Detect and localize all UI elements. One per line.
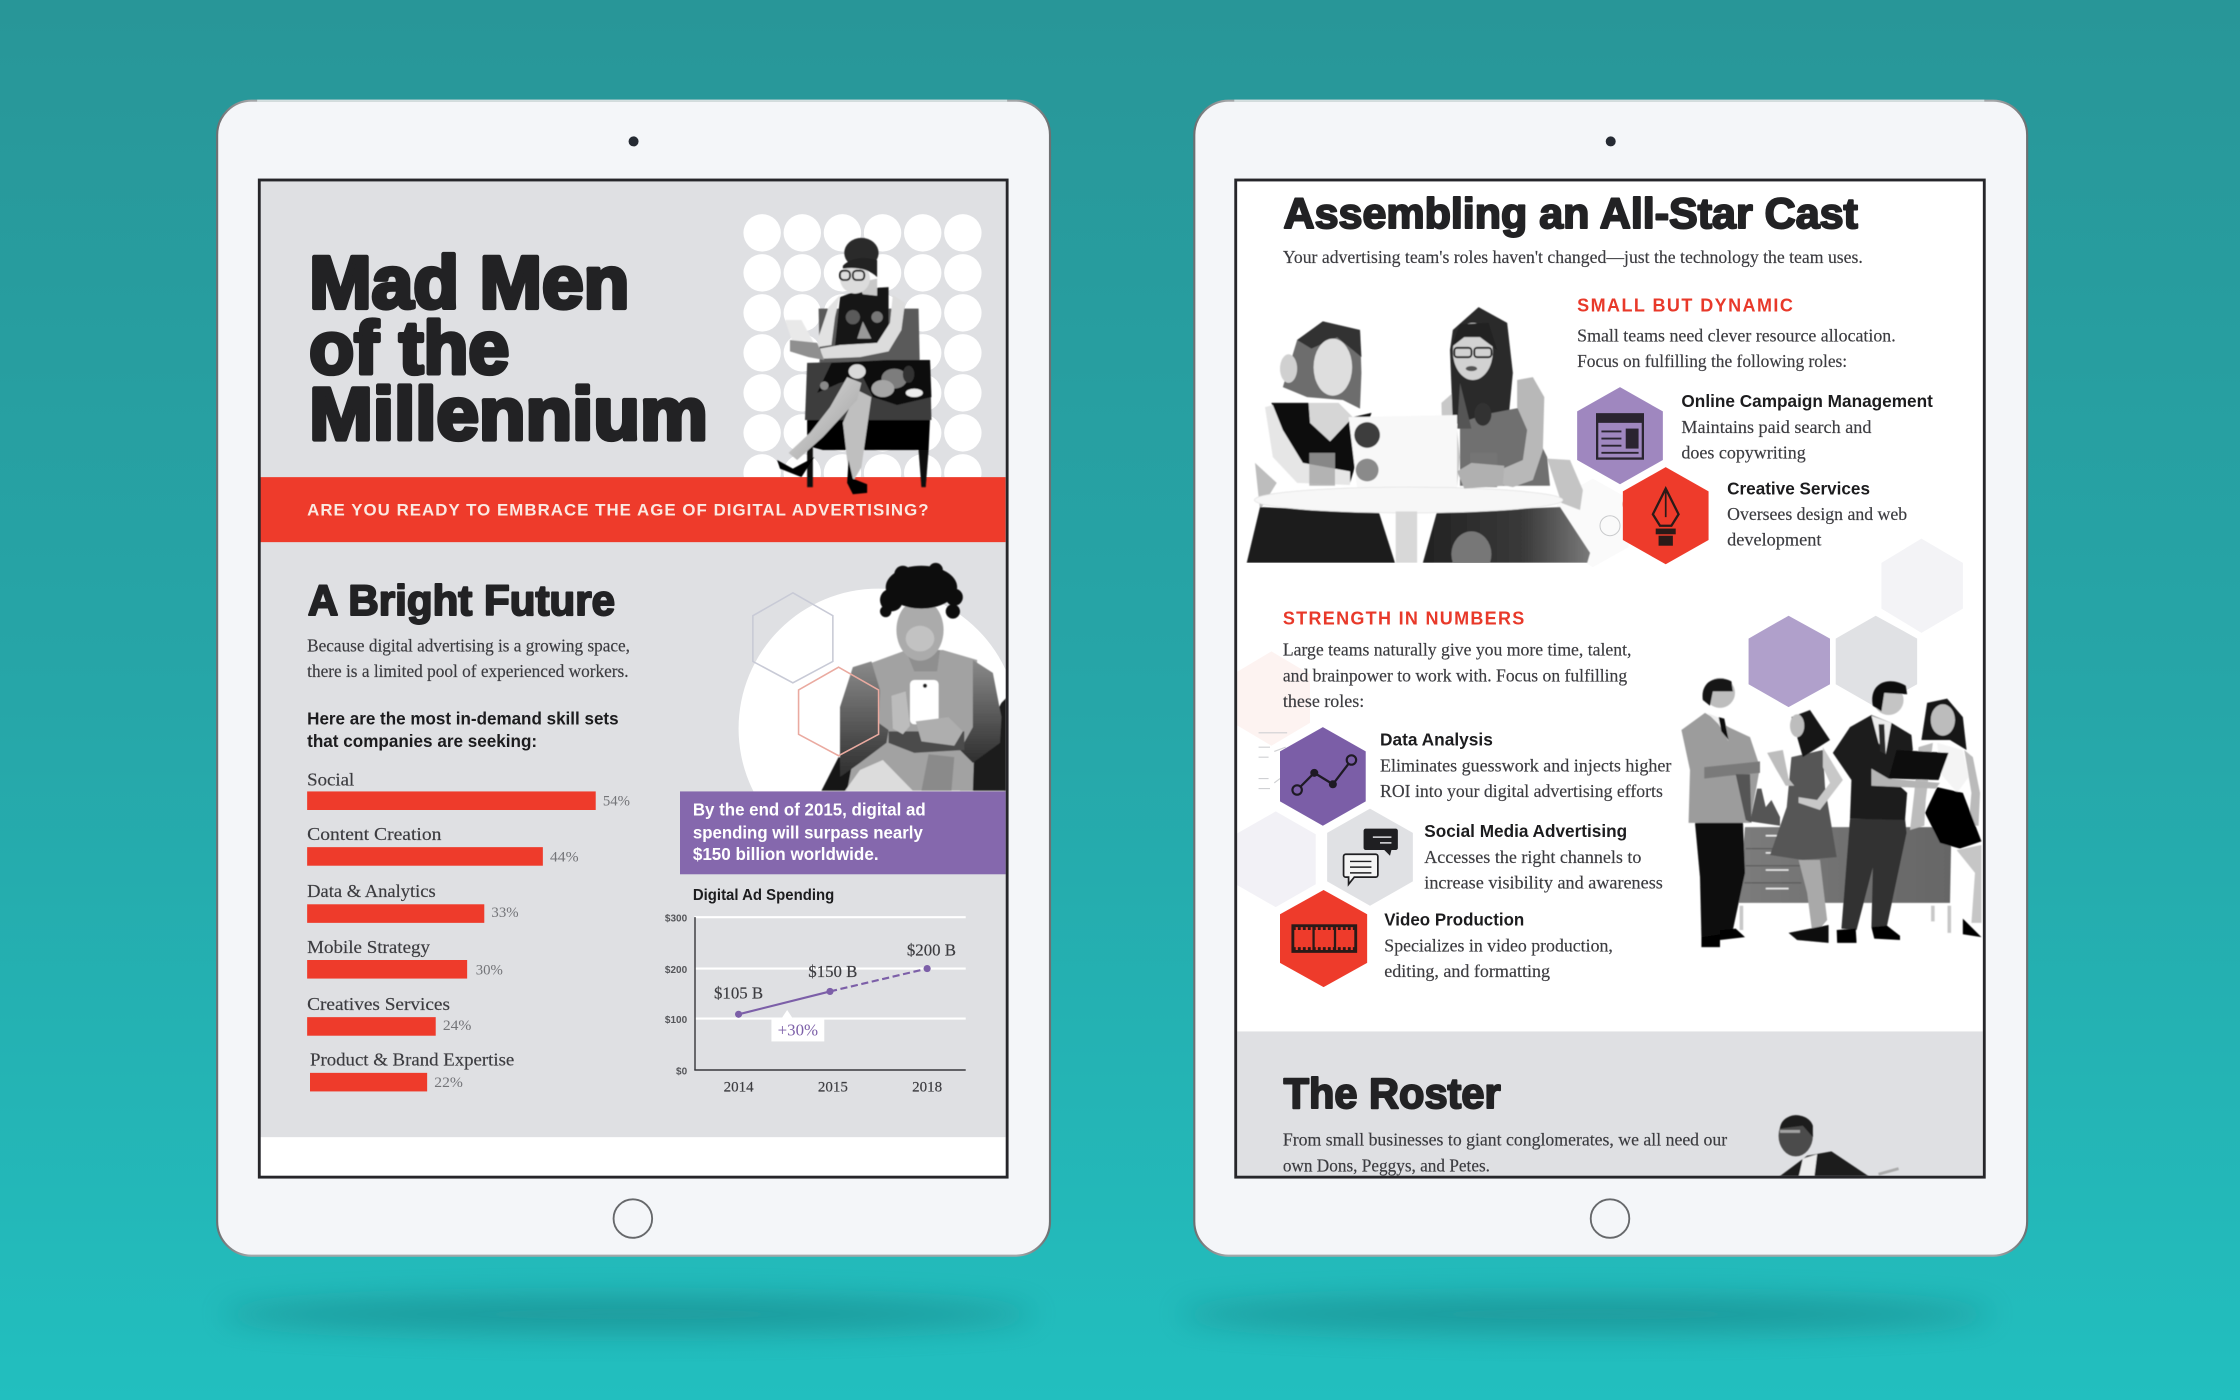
photo: two women at table [1247, 307, 1590, 577]
screen [1233, 181, 1983, 1177]
bar chart: skill sets [307, 770, 630, 1091]
screen [260, 181, 1019, 1176]
bar: Mobile Strategy: Mobile Strategy [307, 937, 430, 957]
white circle behind woman [738, 588, 1006, 792]
title: Mad Men [309, 241, 629, 324]
y axis labels: $200 [665, 965, 688, 976]
body [1577, 325, 1896, 371]
screen frame [259, 180, 1007, 1177]
home button [1591, 1199, 1629, 1238]
bar: Mobile Strategy: 30% [476, 962, 503, 978]
outline hexagon grey [753, 593, 833, 683]
roster intro: own Dons, Peggys, and Petes. [1283, 1155, 1490, 1175]
heading: Assembling an All-Star Cast: Assembling an All-Star Cast [1284, 190, 1858, 238]
screen frame [1236, 180, 1984, 1177]
icon: browser window on purple hexagon [1577, 387, 1663, 484]
value labels: $105 B [714, 984, 763, 1003]
section: small but dynamic [1577, 295, 1896, 371]
pale lavender hexagon [1236, 811, 1316, 907]
purple stat callout [680, 791, 1007, 874]
photo: team of four with sideboard [1681, 678, 1981, 947]
role: online campaign management: does copywriting [1681, 443, 1806, 463]
role: creative services: Creative Services [1727, 478, 1870, 498]
faint hexagon behind photo [1557, 479, 1629, 567]
title: Millennium [309, 372, 708, 455]
top edge highlight [1234, 100, 1984, 102]
tablet body [217, 101, 1050, 1256]
red banner [260, 477, 1006, 542]
body: Focus on fulfilling the following roles: [1577, 351, 1847, 371]
screen white base [1238, 182, 1982, 1032]
title [310, 252, 706, 442]
intro paragraph: there is a limited pool of experienced workers. [307, 661, 629, 681]
x axis labels [724, 1082, 942, 1092]
value labels: $200 B [907, 941, 956, 960]
intro paragraph: Because digital advertising is a growing space, [307, 635, 630, 655]
math scribbles [1259, 733, 1287, 789]
bold lead-in [307, 708, 619, 751]
heading: A Bright Future: A Bright Future [308, 577, 615, 625]
bar: Social: 54% [603, 794, 630, 810]
bold lead-in: Here are the most in-demand skill sets [307, 708, 619, 728]
photo: man in suit [1779, 1115, 1899, 1177]
roster intro [1283, 1130, 1727, 1175]
decorative hexagon grey [1836, 616, 1917, 707]
bar: Mobile Strategy [307, 937, 503, 979]
grey roster band [1237, 1031, 1983, 1177]
icon: film strip on red hexagon [1280, 890, 1367, 987]
bar: Content Creation: Content Creation [307, 824, 442, 844]
heading: The Roster: The Roster [1284, 1070, 1501, 1118]
camera [629, 136, 639, 146]
purple stat callout: $150 billion worldwide. [693, 844, 879, 864]
x axis labels: 2015 [818, 1079, 848, 1095]
faint decoration behind pen icon [1600, 497, 1641, 536]
bar: Data & Analytics: Data & Analytics [307, 881, 436, 901]
photo: seated woman with tablet [777, 238, 931, 494]
bold lead-in: that companies are seeking: [307, 731, 537, 751]
pale hexagon top right [1881, 539, 1963, 633]
tablet shadow right [1179, 1297, 1993, 1331]
bar: Product & Brand Expertise: 22% [434, 1075, 463, 1091]
role: video production: Video Production [1384, 910, 1524, 930]
screen white base [261, 1138, 1006, 1176]
photo: woman with phone [821, 563, 1007, 791]
role: social media advertising [1424, 821, 1663, 893]
polka dots [743, 214, 982, 492]
growth tag: +30% [778, 1021, 818, 1040]
role: social media advertising: increase visibility and awareness [1424, 873, 1663, 893]
purple stat callout: spending will surpass nearly [693, 823, 923, 843]
role: data analysis: ROI into your digital advertising efforts [1380, 781, 1663, 801]
x axis labels: 2014 [724, 1079, 754, 1095]
bar: Data & Analytics: 33% [491, 905, 519, 921]
y axis labels: $300 [665, 913, 688, 924]
bar: Creatives Services: 24% [443, 1018, 472, 1034]
bar: Content Creation [307, 824, 579, 866]
role: video production [1384, 910, 1613, 981]
line chart: digital ad spending [665, 887, 966, 1095]
role: data analysis: Eliminates guesswork and injects higher [1380, 755, 1672, 775]
tablet body [1194, 101, 2027, 1256]
body: Small teams need clever resource allocation. [1577, 325, 1896, 345]
heading: STRENGTH IN NUMBERS [1283, 608, 1524, 628]
role: creative services: development [1727, 530, 1822, 550]
icon: pen nib on red hexagon [1623, 467, 1709, 564]
role: online campaign management [1681, 391, 1933, 463]
bar: Product & Brand Expertise [310, 1050, 514, 1091]
role: data analysis [1380, 730, 1672, 801]
role: data analysis: Data Analysis [1380, 730, 1493, 750]
role: social media advertising: Social Media Advertising [1424, 821, 1627, 841]
pale pink hexagon [1233, 651, 1310, 746]
bar: Product & Brand Expertise: Product & Brand Expertise [310, 1050, 514, 1070]
role: online campaign management: Maintains paid search and [1681, 417, 1872, 437]
intro paragraph [307, 635, 630, 681]
outline hexagon pink [799, 667, 879, 756]
role: video production: editing, and formatting [1384, 961, 1550, 981]
top edge highlight [257, 100, 1007, 102]
body [1283, 640, 1631, 711]
role: video production: Specializes in video production, [1384, 935, 1613, 955]
role: creative services: Oversees design and web [1727, 504, 1907, 524]
y axis labels: $100 [665, 1015, 688, 1026]
bar: Content Creation: 44% [550, 849, 579, 865]
bar: Social [307, 770, 630, 810]
decorative hexagon purple [1749, 616, 1830, 707]
body: and brainpower to work with. Focus on fulfilling [1283, 665, 1627, 685]
camera [1606, 136, 1616, 146]
role: creative services [1727, 478, 1907, 550]
x axis labels: 2018 [912, 1079, 942, 1095]
bar: Creatives Services: Creatives Services [307, 994, 450, 1014]
roster intro: From small businesses to giant conglomerates, we all need our [1283, 1130, 1727, 1150]
tablet shadow left [221, 1297, 1036, 1331]
body: these roles: [1283, 691, 1364, 711]
role: online campaign management: Online Campaign Management [1681, 391, 1933, 411]
section: strength in numbers [1283, 608, 1631, 711]
purple stat callout: By the end of 2015, digital ad [693, 800, 926, 820]
body: Large teams naturally give you more time, talent, [1283, 640, 1631, 660]
growth tag [771, 1010, 824, 1041]
value labels: $150 B [808, 962, 857, 981]
heading: SMALL BUT DYNAMIC [1577, 295, 1793, 315]
banner text: ARE YOU READY TO EMBRACE THE AGE OF DIGITAL ADVERTISING? [307, 501, 929, 520]
icon: data line on purple hexagon [1280, 727, 1366, 826]
title: of the [309, 307, 509, 390]
grey page background [260, 181, 1006, 1137]
value labels [714, 941, 956, 1003]
bar: Data & Analytics [307, 881, 519, 923]
bar: Social: Social [307, 770, 354, 790]
home button [614, 1199, 652, 1238]
y axis labels [665, 913, 688, 1077]
left tablet [217, 101, 1050, 1256]
bar: Creatives Services [307, 994, 472, 1036]
right tablet [1194, 101, 2027, 1256]
subheading: Your advertising team's roles haven't changed—just the technology the team uses. [1283, 247, 1863, 267]
icon: chat bubbles on grey hexagon [1327, 809, 1413, 906]
y axis labels: $0 [676, 1066, 688, 1077]
data line [735, 965, 931, 1018]
role: social media advertising: Accesses the right channels to [1424, 847, 1642, 867]
chart title: Digital Ad Spending [693, 887, 834, 904]
